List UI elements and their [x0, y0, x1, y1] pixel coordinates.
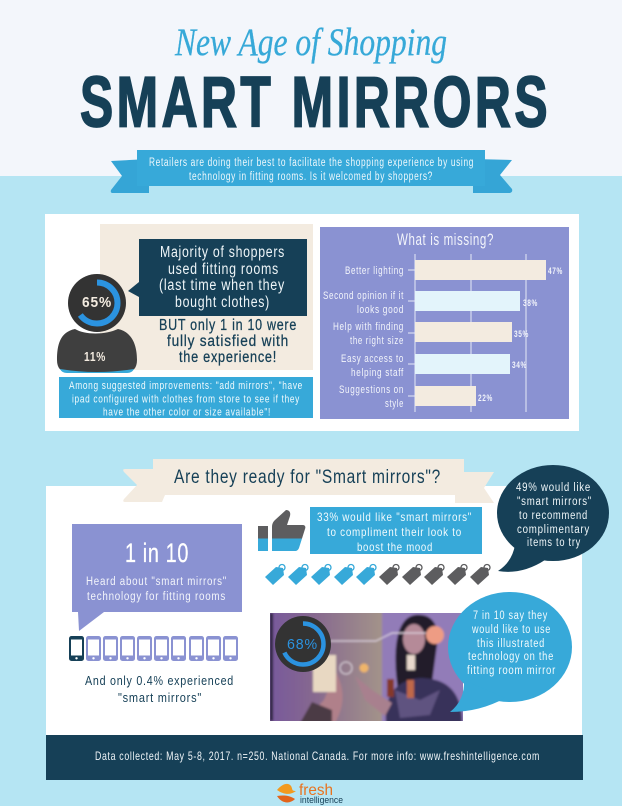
speech bubble: 49% recommend: items to try — [527, 537, 581, 549]
text: only 0.4% experienced — [85, 673, 234, 705]
banner: are they ready — [123, 459, 494, 503]
banner: are they ready: Are they ready for "Smart mirrors"? — [174, 467, 441, 488]
icons: ten price tags — [265, 564, 490, 585]
chart title: What is missing? — [397, 230, 494, 249]
bar chart: what is missing: 47% — [548, 266, 563, 277]
bar chart: what is missing: Help with finding — [333, 321, 404, 333]
icons: ten phones — [69, 636, 238, 661]
speech bubble: 7 in 10: fitting room mirror — [467, 665, 556, 677]
text box: suggested improvements: ipad configured with clothes from store to see if they — [72, 394, 300, 406]
photo: woman using smart mirror — [268, 611, 465, 723]
bar chart: what is missing — [320, 227, 569, 419]
callout: 1 in 10: Heard about "smart mirrors" — [86, 576, 227, 588]
title — [80, 21, 551, 142]
intro ribbon: technology in fitting rooms. Is it welcomed by shoppers? — [189, 171, 433, 183]
callout: majority of shoppers: used fitting rooms — [168, 261, 279, 278]
callout: 1 in 10: 1 in 10 — [125, 538, 189, 568]
beige backdrop — [100, 224, 313, 370]
bar chart: what is missing: looks good — [357, 304, 404, 316]
icon: person with 65% head and 11% body: 11% — [84, 349, 106, 364]
chart: 68% donut — [275, 616, 331, 672]
speech bubble: 49% recommend: to recommend — [519, 510, 588, 522]
bar chart: what is missing: 38% — [523, 298, 538, 309]
text: but only 1 in 10 — [159, 317, 297, 366]
speech bubble: 7 in 10: would like to use — [471, 624, 551, 636]
intro ribbon: Retailers are doing their best to facilitate the shopping experience by using — [149, 157, 474, 169]
text box: 33% compliment: 33% would like "smart mirrors" — [317, 510, 472, 524]
callout: 1 in 10: technology for fitting rooms — [87, 591, 226, 603]
bar chart: what is missing: 22% — [478, 393, 493, 404]
speech bubble: 49% recommend: complimentary — [517, 524, 590, 536]
bar chart: what is missing: 34% — [512, 360, 527, 371]
bar chart: what is missing: Better lighting — [345, 265, 404, 277]
text box: suggested improvements: have the other color or size available"! — [103, 406, 271, 418]
speech bubble: 7 in 10: 7 in 10 say they — [473, 610, 548, 622]
bar chart: what is missing: the right size — [350, 335, 404, 347]
logo: fresh intelligence: fresh — [299, 782, 333, 799]
text box: 33% compliment — [310, 507, 482, 554]
callout: 1 in 10 — [72, 524, 242, 631]
bar chart: what is missing: helping staff — [351, 367, 404, 379]
icon: person with 65% head and 11% body: 65% — [82, 295, 112, 311]
panel: smart mirror readiness — [46, 459, 609, 735]
speech bubble: 49% recommend: 49% would like — [516, 482, 591, 494]
bar chart: what is missing: Second opinion if it — [323, 290, 404, 302]
intro ribbon — [111, 150, 512, 193]
text box: suggested improvements — [59, 377, 313, 418]
text: only 0.4% experienced: "smart mirrors" — [118, 690, 202, 705]
text box: 33% compliment: to compliment their look to — [327, 525, 462, 539]
bar chart: what is missing: Easy access to — [341, 353, 404, 365]
logo: fresh intelligence — [277, 782, 343, 805]
text: only 0.4% experienced: And only 0.4% experienced — [85, 673, 234, 688]
speech bubble: 7 in 10: technology on the — [468, 651, 554, 663]
chart: 68% donut: 68% — [287, 636, 318, 653]
subtitle: New Age of Shopping: New Age of Shopping — [174, 21, 447, 64]
speech bubble: 7 in 10 — [448, 592, 572, 712]
speech bubble: 49% recommend — [497, 465, 609, 572]
text box: 33% compliment: boost the mood — [357, 540, 433, 554]
text: but only 1 in 10: the experience! — [179, 349, 277, 366]
bar chart: what is missing: style — [385, 398, 404, 410]
footer bar — [46, 735, 583, 780]
speech bubble: 7 in 10: this illustrated — [477, 638, 545, 650]
bar chart: what is missing: Suggestions on — [339, 384, 404, 396]
speech bubble: 49% recommend: "smart mirrors" — [517, 496, 592, 508]
callout: majority of shoppers — [128, 239, 307, 316]
callout: majority of shoppers: (last time when they — [159, 277, 285, 294]
bar chart: what is missing: 35% — [514, 329, 529, 340]
text box: suggested improvements: Among suggested improvements: "add mirrors", "have — [69, 380, 303, 392]
callout: majority of shoppers: Majority of shoppers — [160, 244, 285, 261]
text: but only 1 in 10: fully satisfied with — [167, 333, 289, 350]
panel: fitting room satisfaction — [45, 214, 579, 431]
callout: majority of shoppers: bought clothes) — [175, 294, 270, 311]
logo: fresh intelligence: intelligence — [300, 795, 343, 805]
text: but only 1 in 10: BUT only 1 in 10 were — [159, 317, 297, 334]
icon: person with 65% head and 11% body — [57, 274, 137, 373]
icon: thumbs up — [258, 510, 306, 551]
